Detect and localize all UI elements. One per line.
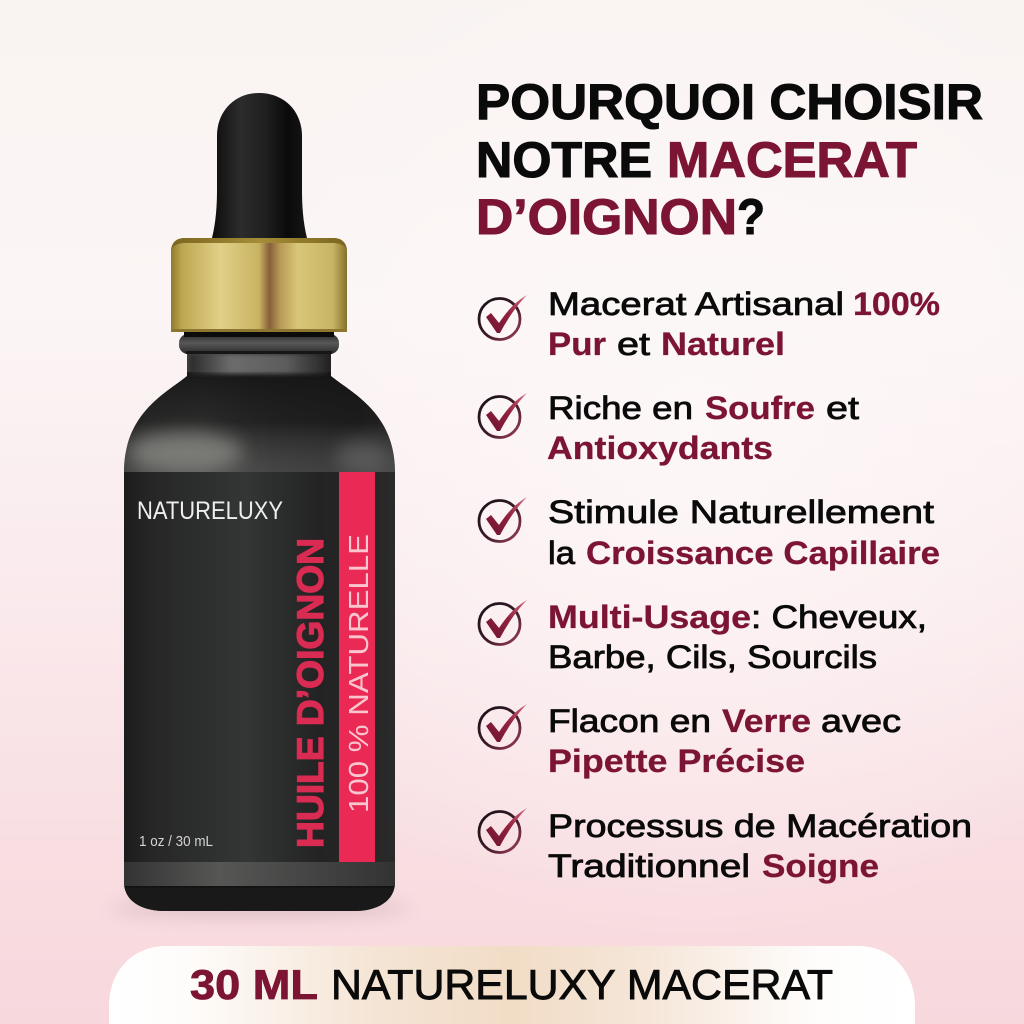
title: D’OIGNON — [476, 189, 737, 245]
neck ring — [179, 334, 339, 354]
benefit 2: et — [826, 390, 859, 426]
benefit 5: Verre — [722, 703, 811, 739]
bottle label background — [124, 472, 395, 862]
benefit 1: Macerat Artisanal — [548, 286, 844, 322]
title: ? — [737, 189, 765, 245]
icon: check 5 — [479, 704, 527, 748]
title — [476, 74, 983, 245]
benefit 6: Soigne — [762, 848, 879, 884]
benefit 5: Pipette Précise — [548, 743, 805, 779]
benefit 2: Riche en — [548, 390, 693, 426]
benefit 1: Pur — [548, 326, 606, 362]
benefit 5: Flacon en — [548, 703, 711, 739]
product bottle — [110, 93, 410, 916]
benefit 1 — [548, 286, 940, 362]
benefit 1: 100% — [853, 286, 940, 322]
bottle body — [120, 350, 400, 915]
icon: check 4 — [479, 600, 527, 644]
banner text: 30 ML — [190, 961, 318, 1008]
benefit 4: : Cheveux, — [751, 599, 927, 635]
benefit 1: et — [617, 326, 650, 362]
benefit 6 — [548, 808, 972, 884]
bottom banner — [109, 946, 915, 1024]
gold collar — [171, 238, 347, 332]
icon: check 6 — [479, 808, 527, 852]
benefit 5 — [548, 703, 901, 779]
product name vertical: HUILE D’OIGNON — [290, 538, 331, 848]
brand name: NATURELUXY — [137, 497, 283, 525]
benefit 4 — [548, 599, 927, 675]
benefit 1: Naturel — [661, 326, 785, 362]
title: NOTRE — [476, 132, 652, 188]
benefit 3: Croissance Capillaire — [586, 535, 940, 571]
benefit 3: la — [548, 535, 575, 571]
icon: check 1 — [479, 295, 527, 340]
benefit 6: Processus de Macération — [548, 808, 972, 844]
banner text: NATURELUXY MACERAT — [331, 961, 833, 1008]
icon: check 3 — [479, 497, 527, 542]
benefit 5: avec — [821, 703, 901, 739]
benefit 2 — [547, 390, 859, 466]
benefit 4: Barbe, Cils, Sourcils — [548, 639, 877, 675]
title: MACERAT — [667, 132, 917, 188]
benefit 6: Traditionnel — [548, 848, 750, 884]
icon: check 2 — [479, 393, 527, 438]
dropper bulb — [212, 93, 307, 238]
title: POURQUOI CHOISIR — [476, 74, 983, 130]
benefit 3: Stimule Naturellement — [548, 494, 934, 530]
benefit 2: Antioxydants — [547, 430, 773, 466]
volume text: 1 oz / 30 mL — [139, 833, 213, 850]
benefit 2: Soufre — [705, 390, 815, 426]
red label stripe — [339, 472, 375, 862]
natural claim vertical: 100 % NATURELLE — [343, 534, 374, 813]
benefit 4: Multi-Usage — [548, 599, 751, 635]
benefit 3 — [548, 494, 940, 571]
